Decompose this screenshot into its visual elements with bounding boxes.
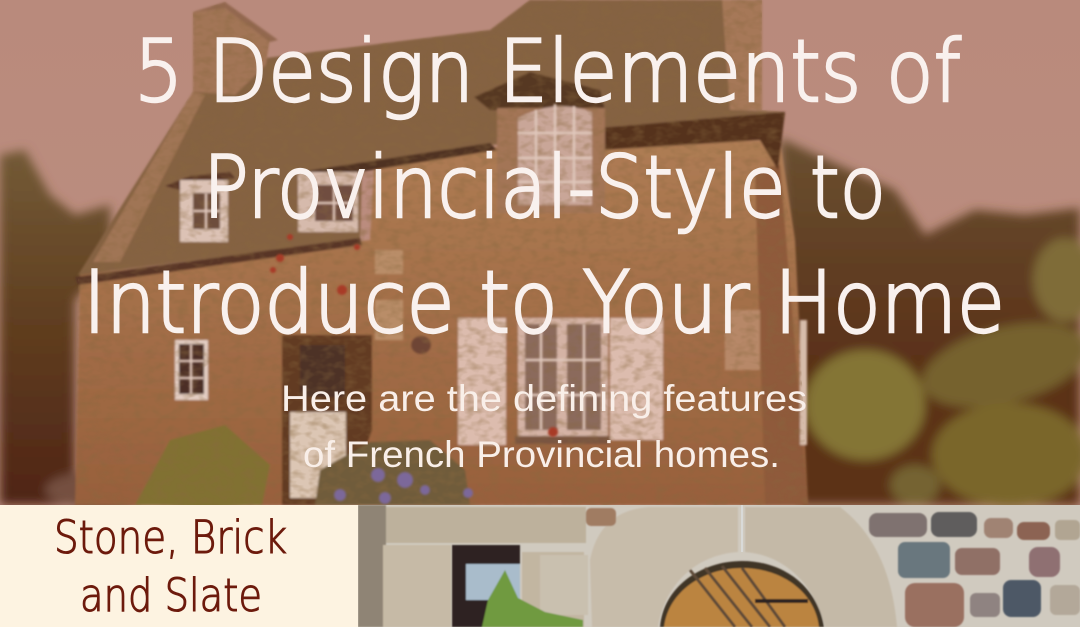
walls [75, 140, 808, 505]
lower features [282, 335, 372, 505]
heading: stone, brick and slate: Stone, Brick [54, 511, 287, 564]
heading: stone, brick and slate: and Slate [80, 569, 262, 622]
flowers [270, 234, 558, 437]
rubble stones [869, 513, 927, 537]
eaves [300, 143, 497, 172]
title [83, 22, 1005, 353]
window panes [179, 104, 601, 430]
panel: stone, brick and slate [0, 505, 1080, 627]
photo: stone wall with arched door [358, 505, 1080, 627]
bushes at door [315, 440, 470, 505]
subtitle [281, 378, 807, 475]
title: Provincial-Style to [203, 138, 886, 238]
subtitle: of French Provincial homes. [303, 434, 780, 475]
arched door [660, 561, 824, 627]
window opening [452, 545, 520, 627]
dormer stonework [497, 108, 605, 213]
title: 5 Design Elements of [134, 22, 961, 122]
roof [78, 0, 785, 275]
texture [75, 0, 810, 505]
chimneys [193, 2, 270, 95]
title: Introduce to Your Home [83, 253, 1005, 353]
subtitle: Here are the defining features [281, 378, 807, 419]
heading: stone, brick and slate [0, 505, 358, 627]
